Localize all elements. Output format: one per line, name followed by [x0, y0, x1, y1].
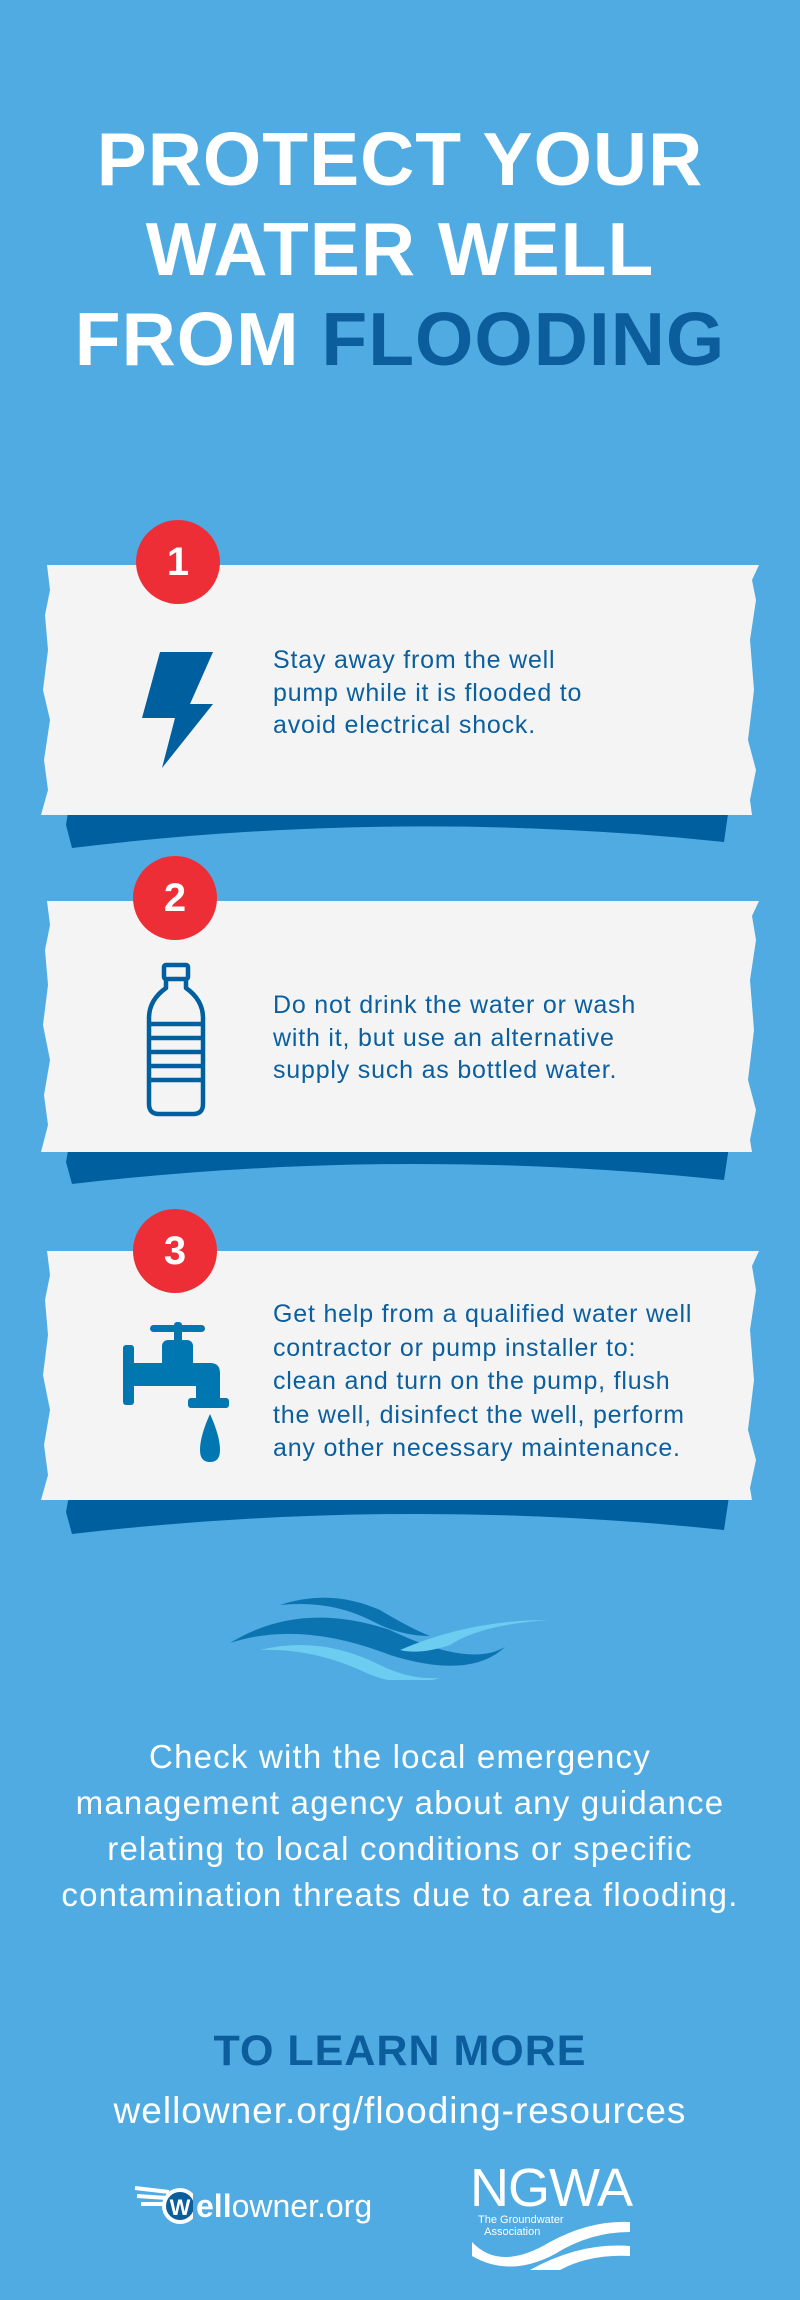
text: url: wellowner.org/flooding-resources: [114, 2090, 686, 2131]
text block: guidance: [61, 1738, 739, 1913]
logo: wellowner: W: [170, 2195, 191, 2220]
text 3: any other necessary maintenance.: [273, 1434, 681, 1462]
logo: NGWA: NGWA: [470, 2158, 632, 2218]
text 2: with it, but use an alternative: [273, 1024, 615, 1052]
panel: step 2: [41, 856, 759, 1184]
icon: lightning: [142, 652, 213, 768]
text 2: Do not drink the water or wash: [273, 991, 636, 1019]
title: [75, 117, 725, 381]
badge 1: 1: [167, 540, 189, 584]
badge 1: [136, 520, 220, 604]
text 1: pump while it is flooded to: [273, 678, 582, 706]
text 3: clean and turn on the pump, flush: [273, 1367, 670, 1395]
text 3: the well, disinfect the well, perform: [273, 1400, 685, 1428]
text 1: [273, 646, 582, 739]
text 3: Get help from a qualified water well: [273, 1300, 692, 1328]
icon: bottle: [146, 962, 206, 1116]
title: WATER WELL: [146, 207, 654, 291]
text 3: [273, 1300, 692, 1462]
panel: step 3: [41, 1209, 759, 1534]
icon: faucet: [123, 1322, 229, 1462]
icon: waves: [230, 1598, 546, 1680]
badge 3: 3: [164, 1229, 186, 1273]
badge 3: [133, 1209, 217, 1293]
text 3: contractor or pump installer to:: [273, 1334, 636, 1362]
text block: guidance: Check with the local emergency: [149, 1738, 651, 1775]
text block: guidance: contamination threats due to area flooding.: [61, 1876, 739, 1913]
title: PROTECT YOUR: [97, 117, 703, 201]
text block: guidance: relating to local conditions or specific: [107, 1830, 693, 1867]
panel: step 1: [41, 520, 759, 848]
logo: NGWA: Association: [484, 2226, 540, 2238]
logo: NGWA: [470, 2158, 633, 2270]
badge 2: [133, 856, 217, 940]
text 1: avoid electrical shock.: [273, 711, 536, 739]
text 2: supply such as bottled water.: [273, 1056, 617, 1084]
logo: wellowner: ellowner.org: [196, 2188, 372, 2224]
title: FROM FLOODING: [75, 297, 725, 381]
logo: NGWA: The Groundwater: [478, 2214, 564, 2226]
badge 2: 2: [164, 876, 186, 920]
text block: guidance: management agency about any guidance: [76, 1784, 724, 1821]
text 1: Stay away from the well: [273, 646, 555, 674]
text 2: [273, 991, 636, 1084]
heading: to learn more: TO LEARN MORE: [214, 2027, 586, 2075]
